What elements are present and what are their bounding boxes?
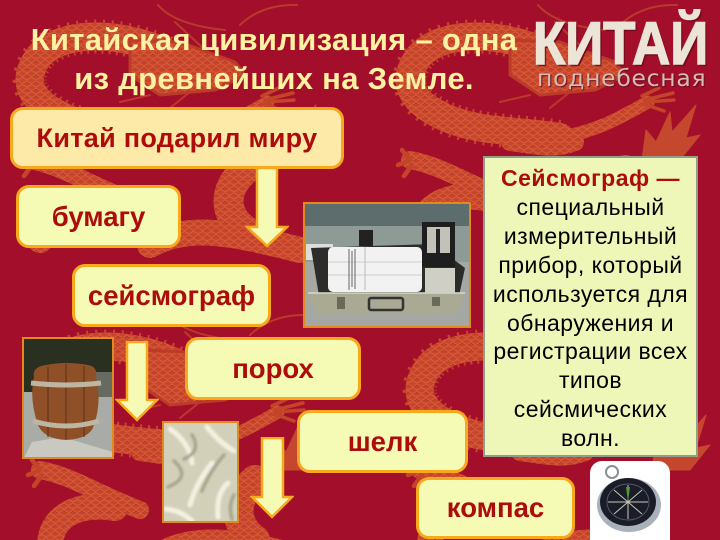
box: порох [185, 337, 361, 400]
heading box: Китай подарил миру: Китай подарил миру [37, 122, 317, 152]
arrow: barrel down [115, 341, 159, 422]
box: шелк [297, 410, 468, 473]
info panel: seismograph definition: типов [559, 367, 622, 393]
title: из древнейших на Земле. [74, 60, 474, 96]
info panel: seismograph definition: прибор, который [498, 252, 683, 278]
box: шелк: шелк [348, 426, 417, 456]
info panel: seismograph definition: волн. [561, 425, 620, 451]
info panel: seismograph definition: Сейсмограф — [501, 165, 680, 191]
photo: powder barrel [22, 337, 114, 459]
info panel: seismograph definition: сейсмических [514, 396, 667, 422]
heading box: Китай подарил миру [10, 107, 344, 169]
box: сейсмограф [72, 264, 271, 327]
box: бумагу [16, 185, 181, 248]
photo: silk [162, 421, 239, 523]
arrow: silk down [250, 437, 294, 519]
info panel: seismograph definition: регистрации всех [493, 338, 688, 364]
title: Китайская цивилизация – одна [31, 22, 517, 57]
info panel: seismograph definition: обнаружения и [507, 310, 674, 336]
box: компас [416, 477, 575, 539]
box: порох: порох [232, 352, 314, 384]
arrow: heading to seismograph [245, 169, 289, 248]
box: бумагу: бумагу [52, 200, 145, 232]
info panel: seismograph definition: используется для [493, 281, 688, 307]
photo: compass [590, 461, 670, 540]
photo: seismograph [303, 202, 471, 328]
logo: Китай Поднебесная: поднебесная [537, 64, 706, 92]
info panel: seismograph definition: измерительный [504, 223, 677, 249]
box: компас: компас [447, 492, 544, 523]
box: сейсмограф: сейсмограф [88, 280, 255, 310]
info panel: seismograph definition: специальный [516, 194, 664, 220]
info panel: seismograph definition [483, 156, 698, 457]
title [31, 22, 518, 96]
logo: Китай Поднебесная: КИТАЙ [533, 10, 708, 77]
